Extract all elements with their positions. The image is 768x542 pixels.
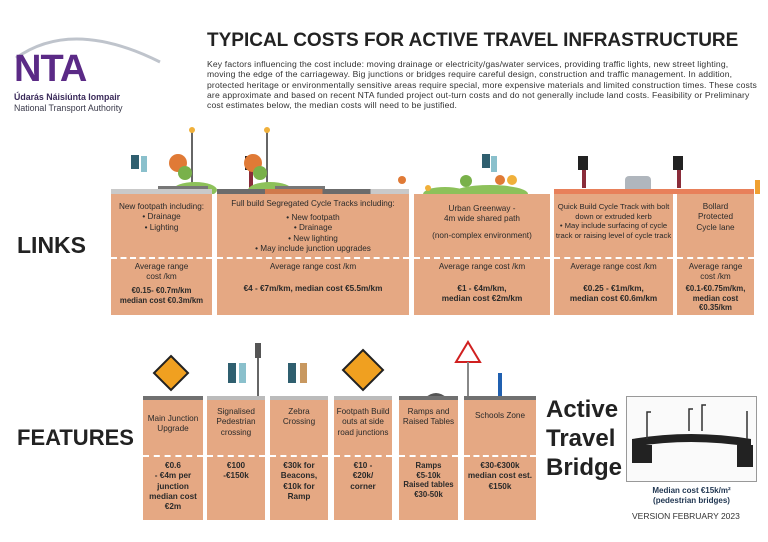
panel: bollard: Average range xyxy=(689,262,742,271)
caption: median cost bridge: Median cost €15k/m² xyxy=(652,486,731,495)
panel: segregated cycle tracks: €4 - €7m/km, median cost €5.5m/km xyxy=(244,284,382,293)
image: bridge xyxy=(626,396,757,482)
panel: footpath build outs: Footpath Build outs at side road junctions xyxy=(337,407,389,436)
roads xyxy=(111,189,212,194)
panel: new footpath: cost /km xyxy=(146,272,177,281)
panel: quick build: median cost €0.6m/km xyxy=(570,294,657,303)
panel: bollard: Protected xyxy=(698,212,733,221)
illustrations: links street scenes xyxy=(131,127,760,194)
heading: active travel bridge: Bridge xyxy=(546,454,622,481)
panel: signalised: -€150k xyxy=(223,471,249,480)
panel: schools zone xyxy=(464,396,536,520)
panel: urban greenway: 4m wide shared path xyxy=(444,214,520,223)
panel: zebra xyxy=(270,396,328,520)
panel: urban greenway: median cost €2m/km xyxy=(442,294,522,303)
panel: main junction: €0.6 xyxy=(165,461,181,470)
panel: footpath build outs: €20k/ xyxy=(353,471,373,480)
panel: signalised xyxy=(207,396,265,520)
panel: bollard: Bollard xyxy=(703,202,728,211)
panel: ramps: €5-10k xyxy=(416,471,441,480)
panel: quick build: • May include surfacing of cycle track or raising level of cycle track xyxy=(556,221,671,240)
panel: ramps xyxy=(399,396,458,520)
panel: new footpath xyxy=(111,194,212,315)
caption: median cost bridge: (pedestrian bridges) xyxy=(653,496,730,505)
panel: new footpath: median cost €0.3m/km xyxy=(120,296,203,305)
label: LINKS: LINKS xyxy=(17,232,86,258)
panel: segregated cycle tracks: • Drainage xyxy=(294,223,332,232)
panel: ramps: Ramps and Raised Tables xyxy=(403,407,454,426)
panel: ramps: €30-50k xyxy=(414,490,443,499)
heading: active travel bridge: Active xyxy=(546,396,618,423)
panel: new footpath: • Drainage xyxy=(142,212,181,221)
logo: NTA: National Transport Authority xyxy=(14,103,123,113)
panel: new footpath: New footpath including: xyxy=(119,202,204,211)
panel: schools zone: €30-€300k median cost est. €150k xyxy=(468,461,532,490)
logo: NTA: NTA xyxy=(14,48,86,90)
panel: bollard: €0.35/km xyxy=(699,303,732,312)
panel: signalised: Signalised Pedestrian crossing xyxy=(216,407,256,436)
panel: main junction: Main Junction Upgrade xyxy=(148,414,198,433)
panel: segregated cycle tracks: • New lighting xyxy=(288,234,338,242)
panel: signalised: €100 xyxy=(227,461,245,470)
heading: active travel bridge xyxy=(546,396,622,481)
panel: quick build: Quick Build Cycle Track with bolt down or extruded kerb xyxy=(558,202,669,221)
panel: footpath build outs: corner xyxy=(350,482,376,490)
panel: urban greenway xyxy=(414,194,550,315)
label: FEATURES: FEATURES xyxy=(17,425,134,450)
panel: new footpath: €0.15- €0.7m/km xyxy=(132,286,191,295)
panel: segregated cycle tracks: Full build Segregated Cycle Tracks including: xyxy=(231,199,395,208)
panel: urban greenway: (non-complex environment) xyxy=(432,231,532,240)
panel: footpath build outs xyxy=(334,396,392,520)
panel: ramps: Ramps xyxy=(416,461,442,470)
panel: ramps: Raised tables xyxy=(403,480,454,489)
panel: segregated cycle tracks: • May include junction upgrades xyxy=(255,244,371,253)
panel: zebra: €30k for Beacons, €10k for Ramp xyxy=(281,461,317,501)
panel: quick build xyxy=(554,194,673,315)
panel: urban greenway: Urban Greenway - xyxy=(449,204,515,213)
panel: zebra: Crossing xyxy=(283,417,315,426)
panel: bollard: Cycle lane xyxy=(696,222,735,232)
panel: bollard: median cost xyxy=(693,294,738,303)
panel: zebra: Zebra xyxy=(288,407,310,416)
icons: features xyxy=(152,340,502,396)
panel: schools zone: Schools Zone xyxy=(475,411,525,420)
panel: new footpath: Average range xyxy=(135,262,188,271)
panel: quick build: €0.25 - €1m/km, xyxy=(583,284,644,293)
panel: main junction: - €4m per junction median cost €2m xyxy=(149,471,197,511)
panel: footpath build outs: €10 - xyxy=(354,461,372,470)
logo: NTA: Údarás Náisiúnta Iompair xyxy=(14,92,120,102)
panel: bollard: cost /km xyxy=(700,272,731,281)
logo: NTA xyxy=(14,38,160,113)
panel: urban greenway: €1 - €4m/km, xyxy=(457,284,507,293)
caption: median cost bridge xyxy=(652,486,731,505)
intro text: Key factors influencing the cost include: moving drainage or electricity/gas/water services, providing traffic lights, new street lighting, moving the edge of the carriageway. Big junctions or bridges require careful design, construction and traffic management. In addition, protected heritage or environmentally sensitive areas require special, more expensive materials and limited construction times. These costs are approximate and based on recent NTA funded project out-turn costs and do not generally include land costs. Feasibility or Preliminary cost estimates below, the median costs will need to be justified. xyxy=(207,59,757,110)
panel: bollard: €0.1-€0.75m/km, xyxy=(686,284,745,293)
panel: new footpath: • Lighting xyxy=(145,222,178,232)
panel: quick build: Average range cost /km xyxy=(570,262,657,271)
version: VERSION FEBRUARY 2023 xyxy=(632,511,740,521)
title: TYPICAL COSTS FOR ACTIVE TRAVEL INFRASTRUCTURE xyxy=(207,30,738,51)
panel: main junction xyxy=(143,396,203,520)
panel: segregated cycle tracks: • New footpath xyxy=(286,213,340,222)
panel: segregated cycle tracks xyxy=(217,194,409,315)
panel: segregated cycle tracks: Average range cost /km xyxy=(270,262,356,271)
panel: bollard xyxy=(677,194,754,315)
heading: active travel bridge: Travel xyxy=(546,425,615,452)
panel: urban greenway: Average range cost /km xyxy=(439,262,525,271)
